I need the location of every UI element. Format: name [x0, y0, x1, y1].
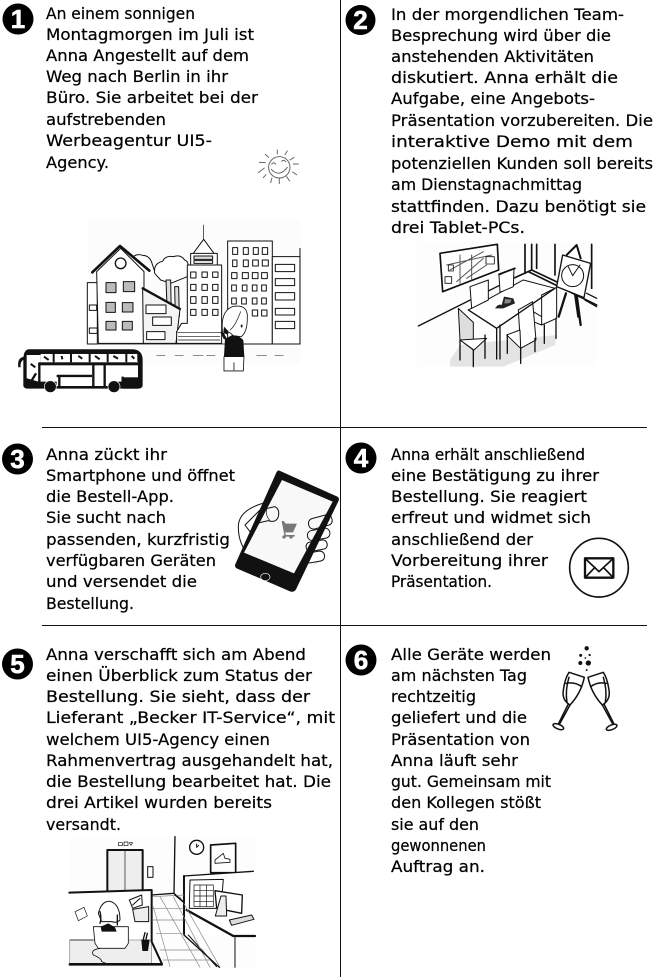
figure: Anna — [220, 306, 247, 371]
icon: sun — [258, 150, 298, 184]
number badge 4 — [346, 442, 376, 474]
text: panel 5 story: einen Überblick zum Status der — [46, 666, 312, 685]
text: panel 2 story: anstehenden Aktivitäten — [391, 47, 594, 66]
text: panel 5 story: Rahmenvertrag ausgehandelt hat, — [46, 751, 333, 770]
text: panel 2 story: diskutiert. Anna erhält die — [391, 68, 618, 87]
text: panel 3 story: verfügbaren Geräten — [46, 551, 216, 570]
text: panel 1 story: An einem sonnigen — [46, 4, 195, 23]
text: panel 6 story: rechtzeitig — [391, 687, 476, 706]
number badge 4: 4 — [354, 443, 369, 473]
panel 6: delivered and celebrating — [346, 644, 618, 876]
text: panel 5 story: Anna verschafft sich am Abend — [46, 645, 306, 664]
icon: double-decker bus — [18, 349, 143, 393]
illustration: city street with Anna and bus — [18, 219, 301, 393]
text: panel 6 story: den Kollegen stößt — [391, 793, 541, 812]
number badge 3: 3 — [10, 444, 25, 474]
illustration: office with Anna at laptop — [69, 837, 255, 968]
panel 2: team meeting — [346, 5, 653, 367]
text: panel 1 story: Werbeagentur UI5- — [46, 131, 212, 150]
text: panel 2 story: interaktive Demo mit dem — [391, 132, 633, 151]
text: panel 5 story: welchem UI5-Agency einen — [46, 730, 270, 749]
text: panel 6 story: Alle Geräte werden — [391, 645, 551, 664]
text: panel 6 story: Auftrag an. — [391, 857, 485, 876]
text: panel 3 story: Smartphone und öffnet — [46, 466, 235, 485]
number badge 6: 6 — [354, 645, 368, 675]
text: panel 2 story: stattfinden. Dazu benötigt sie — [391, 197, 646, 216]
text: panel 4 story: Anna erhält anschließend — [391, 445, 585, 464]
number badge 6 — [346, 644, 376, 676]
number badge 5 — [2, 648, 33, 680]
text: panel 4 story: erfreut und widmet sich — [391, 508, 591, 527]
text: panel 3 story: Bestellung. — [46, 594, 134, 613]
text: panel 4 story: Präsentation. — [391, 572, 492, 591]
icon: champagne glasses with bubbles — [552, 646, 618, 732]
text: panel 5 story — [46, 645, 335, 834]
text: panel 6 story: am nächsten Tag — [391, 666, 527, 685]
text: panel 2 story: Präsentation vorzubereiten. Die — [391, 111, 653, 130]
illustration: hand holding smartphone with cart — [235, 471, 339, 592]
number badge 1 — [2, 4, 34, 34]
text: panel 3 story: Sie sucht nach — [46, 508, 166, 527]
number badge 5: 5 — [10, 649, 25, 679]
text: panel 1 story: Agency. — [46, 153, 109, 172]
text: panel 6 story: Präsentation von — [391, 730, 530, 749]
text: panel 1 story: Büro. Sie arbeitet bei der — [46, 88, 258, 107]
text: panel 6 story: sie auf den — [391, 815, 479, 834]
text: panel 2 story: drei Tablet-PCs. — [391, 218, 525, 237]
text: panel 3 story: und versendet die — [46, 572, 197, 591]
text: panel 6 story — [391, 645, 551, 876]
number badge 2: 2 — [353, 5, 368, 35]
text: panel 3 story: die Bestell-App. — [46, 487, 174, 506]
number badge 3 — [2, 444, 33, 474]
text: panel 2 story: In der morgendlichen Team- — [391, 5, 624, 24]
text: panel 1 story: Anna Angestellt auf dem — [46, 46, 249, 65]
text: panel 1 story: Montagmorgen im Juli ist — [46, 25, 254, 44]
text: panel 6 story: gewonnenen — [391, 836, 486, 855]
text: panel 5 story: Lieferant „Becker IT-Service“, mit — [46, 708, 335, 727]
text: panel 5 story: versandt. — [46, 815, 121, 834]
icon: envelope in circle — [570, 538, 628, 597]
text: panel 4 story: eine Bestätigung zu ihrer — [391, 466, 599, 485]
text: panel 4 story: Vorbereitung ihrer — [391, 551, 548, 570]
text: panel 6 story: Anna läuft sehr — [391, 751, 518, 770]
panel 1: morning commute — [2, 4, 301, 393]
text: panel 5 story: Bestellung. Sie sieht, dass der — [46, 687, 310, 706]
text: panel 2 story: Besprechung wird über die — [391, 26, 611, 45]
text: panel 6 story: gut. Gemeinsam mit — [391, 772, 551, 791]
text: panel 2 story: Aufgabe, eine Angebots- — [391, 89, 595, 108]
number badge 1: 1 — [11, 4, 25, 34]
text: panel 5 story: die Bestellung bearbeitet hat. Die — [46, 772, 331, 791]
text: panel 4 story — [391, 445, 599, 591]
number badge 2 — [346, 5, 376, 35]
city buildings — [87, 225, 300, 356]
text: panel 2 story — [391, 5, 653, 237]
illustration: meeting room — [417, 242, 597, 367]
text: panel 3 story — [46, 445, 235, 613]
text: panel 1 story: aufstrebenden — [46, 110, 166, 129]
text: panel 4 story: Bestellung. Sie reagiert — [391, 487, 587, 506]
text: panel 2 story: potenziellen Kunden soll bereits — [391, 154, 653, 173]
text: panel 1 story — [46, 4, 258, 172]
text: panel 4 story: anschließend der — [391, 530, 533, 549]
panel 4: order confirmation — [346, 442, 628, 597]
panel 3: ordering with smartphone — [2, 444, 339, 613]
text: panel 2 story: am Dienstagnachmittag — [391, 175, 582, 194]
text: panel 1 story: Weg nach Berlin in ihr — [46, 67, 228, 86]
text: panel 3 story: Anna zückt ihr — [46, 445, 167, 464]
text: panel 6 story: geliefert und die — [391, 708, 527, 727]
text: panel 5 story: drei Artikel wurden bereits — [46, 793, 272, 812]
panel 5: order status — [2, 645, 335, 968]
text: panel 3 story: passenden, kurzfristig — [46, 530, 230, 549]
